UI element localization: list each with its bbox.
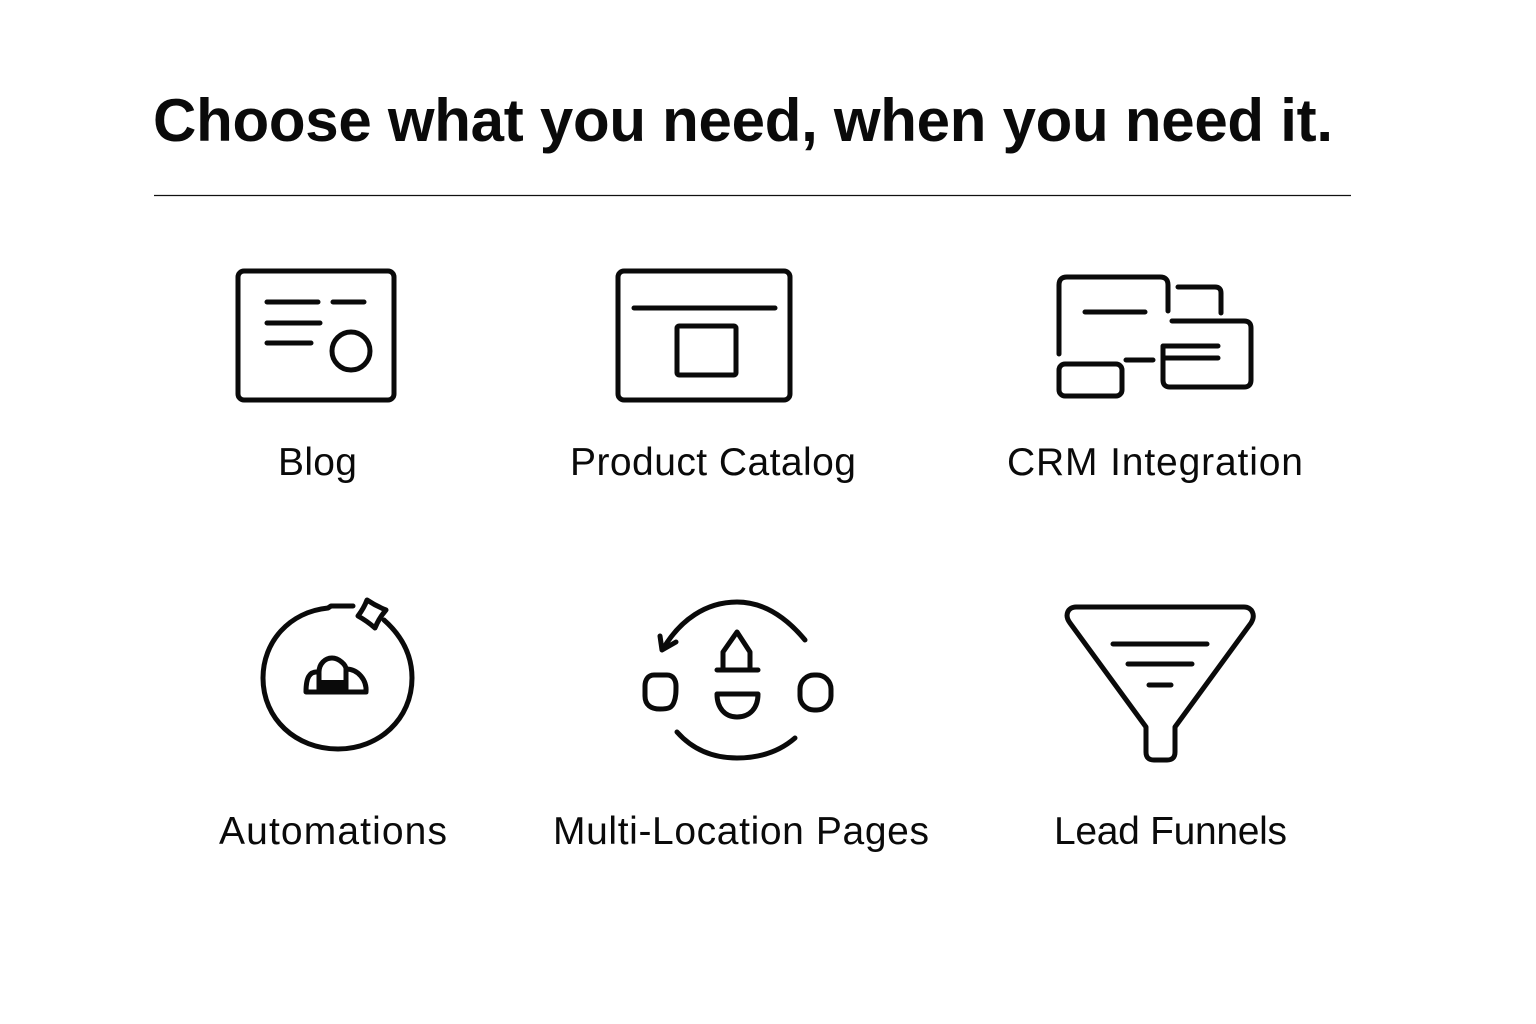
panel: automations [219,600,447,853]
label: product catalog: Product Catalog [570,441,856,484]
label: automations: Automations [219,810,447,853]
icon: connected windows [1059,277,1251,396]
title: Choose what you need, when you need it. [153,87,1333,154]
icon: location cycle [645,602,831,758]
icon: automation circle with dome [263,600,412,749]
icon: funnel [1067,607,1253,760]
panel: lead funnels [1054,607,1287,853]
icon: product catalog window [618,271,790,400]
panel: multi-location pages [553,602,929,853]
label: lead funnels: Lead Funnels [1054,810,1287,853]
panel: blog [238,271,394,484]
label: crm integration: CRM Integration [1007,441,1303,484]
label: multi-location pages: Multi-Location Pages [553,810,929,853]
panel: crm integration [1007,277,1303,484]
panel: product catalog [570,271,856,484]
icon: blog page [238,271,394,400]
label: blog: Blog [278,441,357,484]
